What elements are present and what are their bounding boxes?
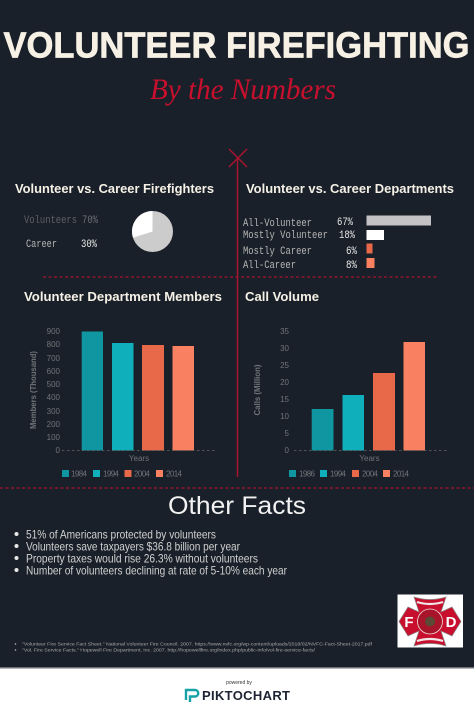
legend: members chart: 1994 xyxy=(103,470,120,478)
row: all-career: 8% xyxy=(346,260,357,272)
row: all-career: All-Career xyxy=(243,260,296,272)
text block: facts list xyxy=(14,528,287,578)
bar chart: members xyxy=(29,327,216,463)
legend row: career: Career xyxy=(26,239,57,251)
bar chart: members: 800 xyxy=(47,340,61,349)
row: mostly career xyxy=(243,244,372,258)
bar chart: members: 300 xyxy=(47,407,61,416)
text block: sources: "Vol. Fire Service Facts." Hopewell Fire Department, Inc. 2007. http://hopewellfire.org/index.php/public-info/vol-fire-service-facts/ xyxy=(22,648,316,652)
legend: calls chart: 1986 xyxy=(299,470,316,478)
bar chart: calls: 30 xyxy=(280,344,290,353)
row: mostly volunteer: 18% xyxy=(339,230,355,242)
legend: calls chart: 1994 xyxy=(330,470,347,478)
footer: powered by piktochart: PIKTOCHART xyxy=(202,688,290,703)
row: all-volunteer xyxy=(243,216,431,230)
legend: calls chart: 2004 xyxy=(362,470,379,478)
legend: members chart xyxy=(62,470,183,478)
legend: members chart: 1984 xyxy=(71,470,88,478)
icon: crossed centre divider xyxy=(229,149,247,477)
text block: facts list: Property taxes would rise 26.3% without volunteers xyxy=(26,552,258,566)
row: mostly career: Mostly Career xyxy=(243,246,312,258)
heading: Call Volume xyxy=(245,290,319,304)
text block: facts list: Number of volunteers declining at rate of 5-10% each year xyxy=(26,564,287,578)
heading: other facts: Other Facts xyxy=(168,492,306,520)
bar chart: calls xyxy=(253,327,447,463)
icon: fire department badge xyxy=(398,594,463,648)
bar chart: members: 100 xyxy=(47,433,61,442)
icon: fire department badge: F xyxy=(404,614,414,631)
bar chart: calls: 15 xyxy=(280,395,290,404)
panel: call volume xyxy=(245,290,447,478)
bar chart: members: 900 xyxy=(47,327,61,336)
subtitle: By the Numbers xyxy=(150,73,336,106)
text block: sources: "Volunteer Fire Service Fact Sheet." National Volunteer Fire Council. 2007. https://www.nvfc.org/wp-content/uploads/2018/02/NVFC-Fact-Sheet-2017.pdf xyxy=(22,642,373,646)
panel: volunteer department members xyxy=(24,290,222,478)
text block: facts list: Volunteers save taxpayers $36.8 billion per year xyxy=(26,540,240,554)
bar chart: calls: 25 xyxy=(280,361,290,370)
text block: sources xyxy=(15,642,373,652)
panel: volunteer vs career departments xyxy=(243,182,454,272)
bar chart: calls: 20 xyxy=(280,378,290,387)
legend row: volunteers: 70% xyxy=(82,215,98,227)
bar chart: calls: 35 xyxy=(280,327,290,336)
legend: members chart: 2004 xyxy=(134,470,151,478)
legend: members chart: 2014 xyxy=(166,470,183,478)
row: all-career xyxy=(243,258,374,272)
bar chart: members: 500 xyxy=(47,380,61,389)
heading: Volunteer vs. Career Firefighters xyxy=(15,182,214,196)
bar chart: members: 700 xyxy=(47,354,61,363)
legend row: volunteers: Volunteers xyxy=(24,215,77,227)
bar chart: members: Years xyxy=(129,454,149,463)
bar chart: members: 200 xyxy=(47,420,61,429)
heading: Volunteer vs. Career Departments xyxy=(246,182,454,196)
bar chart: members: 0 xyxy=(56,446,61,455)
bar chart: calls: 10 xyxy=(280,412,290,421)
row: mostly career: 6% xyxy=(346,246,357,258)
row: all-volunteer: 67% xyxy=(337,217,353,229)
text block: facts list: 51% of Americans protected by volunteers xyxy=(26,528,216,542)
legend row: career: 30% xyxy=(81,239,97,251)
bar chart: members: 400 xyxy=(47,393,61,402)
legend row: career xyxy=(26,239,97,251)
footer: powered by piktochart: powered by xyxy=(226,680,252,686)
bar chart: members: Members (Thousand) xyxy=(29,351,38,429)
heading: Volunteer Department Members xyxy=(24,290,222,304)
icon: piktochart logo xyxy=(186,690,198,702)
panel: volunteer vs career firefighters xyxy=(15,182,214,252)
bar chart: members: 600 xyxy=(47,367,61,376)
legend: calls chart: 2014 xyxy=(393,470,410,478)
icon: fire department badge: D xyxy=(446,614,457,631)
bar chart: calls: Years xyxy=(359,454,380,463)
bar chart: calls: Calls (Million) xyxy=(253,364,262,416)
bar chart: calls: 0 xyxy=(285,446,290,455)
pie chart xyxy=(132,211,173,252)
bar chart: calls: 5 xyxy=(285,429,290,438)
legend: calls chart xyxy=(289,470,410,478)
footer: powered by piktochart xyxy=(186,680,290,703)
row: all-volunteer: All-Volunteer xyxy=(243,218,312,230)
row: mostly volunteer: Mostly Volunteer xyxy=(243,230,328,242)
